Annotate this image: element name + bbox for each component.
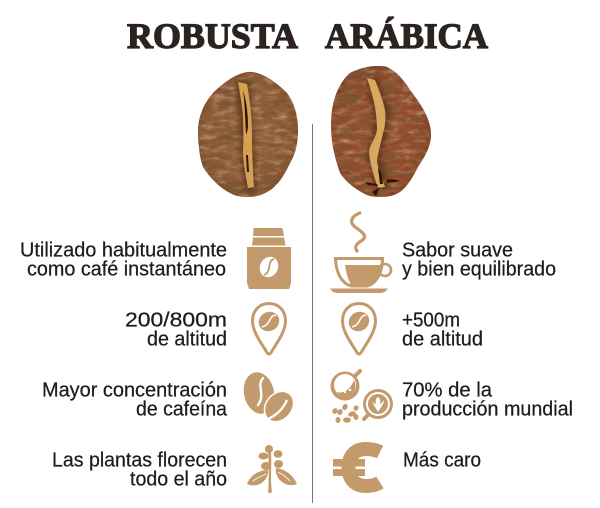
text: world production [402,380,573,420]
coffee bean photo: robusta [198,72,298,197]
title: Arábica: ARÁBICA [325,16,488,56]
text: instant coffee: como café instantáneo [27,258,226,280]
text: smooth flavor: Sabor suave [402,240,513,262]
text: flowering plants: Las plantas florecen [52,450,227,472]
text: caffeine: Mayor concentración [42,380,227,402]
icon: euro sign [333,449,380,486]
text: altitude robusta: 200/800m [125,310,227,332]
text: altitude arabica: de altitud [402,328,483,350]
icon: location pin robusta [252,304,286,354]
text: smooth flavor [402,240,556,280]
icon: coffee plant [247,445,297,493]
icon: two coffee beans [240,369,300,427]
text: world production: producción mundial [402,398,573,420]
center divider line [312,124,313,503]
icon: coffee jar [247,228,291,289]
text: altitude arabica: +500m [402,310,460,332]
text: altitude robusta [125,310,227,350]
text: smooth flavor: y bien equilibrado [402,258,556,280]
text: instant coffee: Utilizado habitualmente [20,240,227,262]
text: flowering plants [52,450,227,490]
text: flowering plants: todo el año [130,468,227,490]
icon: cup of coffee [330,212,391,293]
coffee bean photo: arabica [331,66,431,197]
text: world production: 70% de la [402,380,493,402]
text: instant coffee [20,240,227,280]
text: more expensive: Más caro [403,450,481,472]
text: altitude arabica [402,310,483,350]
text: altitude robusta: de altitud [147,328,227,350]
text: caffeine [42,380,228,420]
icon: location pin arabica [342,304,376,354]
icon: coffee cups and beans [330,371,393,423]
text: caffeine: de cafeína [136,398,228,420]
title: Robusta: ROBUSTA [127,16,298,56]
